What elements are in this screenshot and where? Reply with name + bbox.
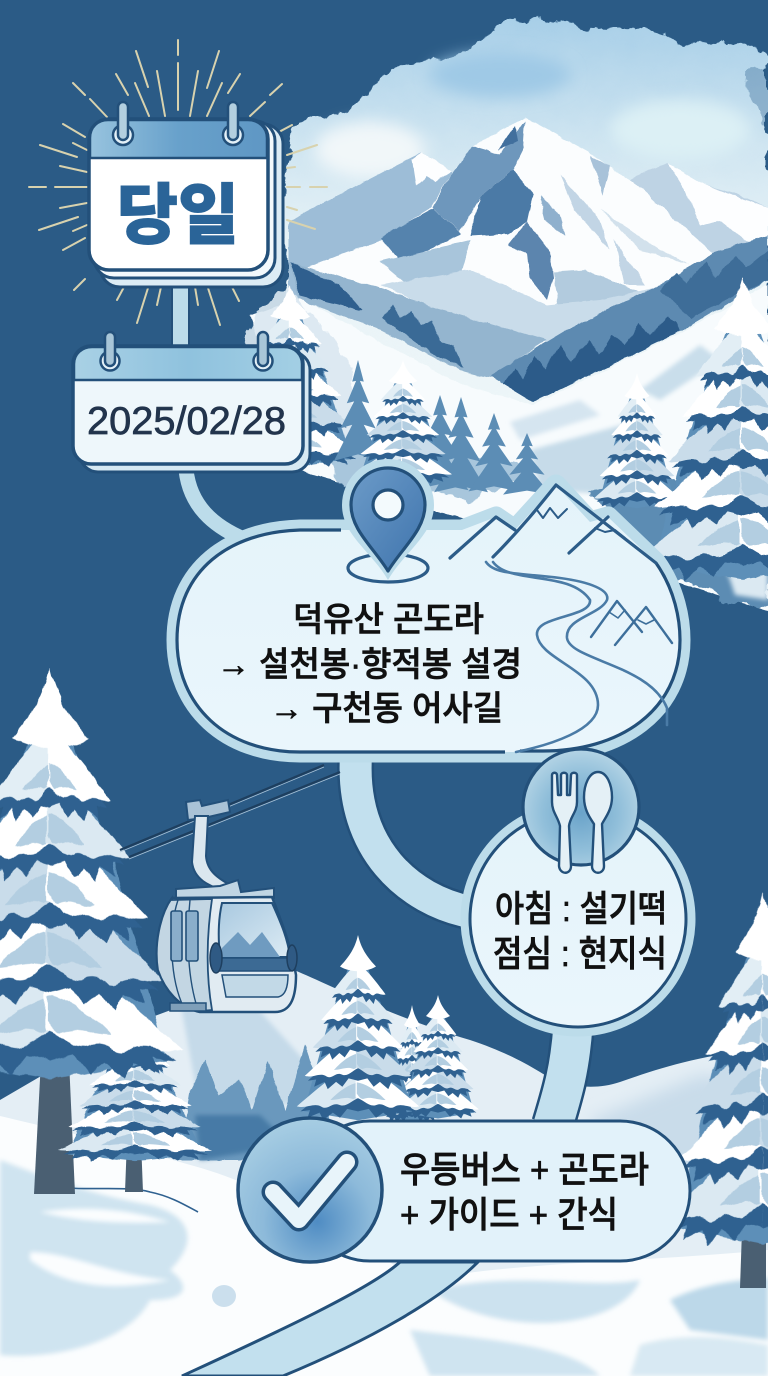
ring right	[254, 332, 272, 370]
snow slopes	[250, 284, 768, 610]
back page	[80, 352, 310, 472]
spoon	[584, 772, 612, 873]
door panel	[157, 898, 212, 1011]
shadow facets	[432, 120, 525, 232]
valley haze	[380, 270, 653, 342]
meal text: 점심 : 현지식	[493, 933, 667, 974]
bumper stripe	[218, 958, 290, 971]
connector: meal circle to pill	[553, 1025, 573, 1125]
panel fill	[177, 485, 680, 752]
back pages	[100, 124, 283, 287]
ring left	[100, 332, 120, 370]
left forest ridge	[288, 262, 547, 378]
cables	[120, 765, 340, 857]
date text: 2025/02/28	[87, 400, 286, 443]
calendar: date	[73, 332, 310, 472]
bumper ends	[210, 943, 297, 973]
panel: snowy valley scene bottom	[0, 668, 768, 1376]
snow ground	[0, 1116, 768, 1376]
connector: calendar to panel	[186, 470, 246, 540]
meal text: 아침 : 설기떡	[495, 888, 667, 929]
tree: small snowy	[354, 360, 452, 483]
far left mountain	[288, 152, 470, 310]
panel: meals	[461, 749, 695, 1036]
snow mound dot	[212, 1285, 236, 1307]
clamp	[186, 800, 230, 820]
far right mountain	[630, 163, 768, 262]
connector: panel to meal circle	[356, 755, 470, 912]
dark fir cluster	[180, 1045, 330, 1160]
small peaks	[591, 601, 672, 645]
page	[89, 119, 268, 270]
ring right	[223, 102, 243, 145]
panel: mountain scene top right	[221, 19, 768, 610]
arm	[192, 816, 236, 890]
connector: pill to bottom	[182, 1262, 478, 1376]
fork	[552, 773, 577, 873]
tree: right edge	[666, 892, 768, 1245]
tree trunks	[34, 1060, 766, 1288]
included text: + 가이드 + 간식	[400, 1194, 618, 1235]
haze under small trees	[315, 440, 540, 500]
route text: 덕유산 곤도라	[293, 601, 484, 639]
ground line	[70, 1188, 198, 1212]
cloud tones	[315, 53, 750, 178]
slope shadows	[510, 345, 720, 495]
tree: small left	[58, 1020, 212, 1161]
main window	[219, 903, 290, 957]
icon: location pin	[342, 459, 434, 582]
right forest ridge	[490, 236, 768, 402]
panel: included items	[238, 1118, 690, 1262]
tree: big left	[0, 668, 183, 1080]
page	[73, 346, 303, 464]
mountains	[250, 117, 768, 610]
roof	[176, 880, 274, 900]
header	[74, 347, 302, 380]
cabin body	[157, 897, 296, 1012]
included text: 우등버스 + 곤도라	[400, 1149, 649, 1190]
gondola	[120, 765, 340, 1012]
tree: medium right	[594, 373, 680, 508]
icon: check badge	[238, 1118, 382, 1262]
lower window	[222, 975, 288, 997]
panel outline	[177, 530, 680, 752]
route text: → 구천동 어사길	[270, 690, 503, 728]
panel: route	[177, 459, 680, 752]
sky cloud wash	[282, 19, 768, 440]
circle	[461, 802, 695, 1036]
tree: big right	[641, 277, 768, 580]
pill	[300, 1121, 690, 1261]
door windows	[171, 911, 198, 961]
calendar: 당일	[89, 102, 283, 287]
door lines	[172, 900, 198, 1010]
ground highlights	[30, 1209, 170, 1286]
speckled cloud edge	[744, 65, 768, 122]
header	[90, 120, 267, 158]
ground blue washes	[0, 1160, 768, 1376]
route text: → 설천봉·향적봉 설경	[217, 646, 522, 684]
snow hill centre	[0, 970, 768, 1376]
small dark firs	[334, 360, 551, 495]
connector: calendar to calendar	[171, 285, 190, 350]
skid	[170, 1003, 206, 1011]
trail lines	[486, 562, 667, 752]
sunburst rays	[29, 40, 327, 325]
mountain outlines	[450, 485, 656, 563]
icon: plate with fork and spoon	[523, 749, 639, 873]
panel border	[177, 485, 680, 752]
label 당일: 당일	[117, 178, 239, 252]
tree: left behind calendar	[221, 285, 359, 467]
trees: centre group	[297, 935, 479, 1123]
main mountain snow body	[300, 117, 713, 350]
haze under right trees	[590, 470, 768, 608]
left scene rough edge	[246, 290, 360, 470]
ring left	[113, 102, 133, 145]
